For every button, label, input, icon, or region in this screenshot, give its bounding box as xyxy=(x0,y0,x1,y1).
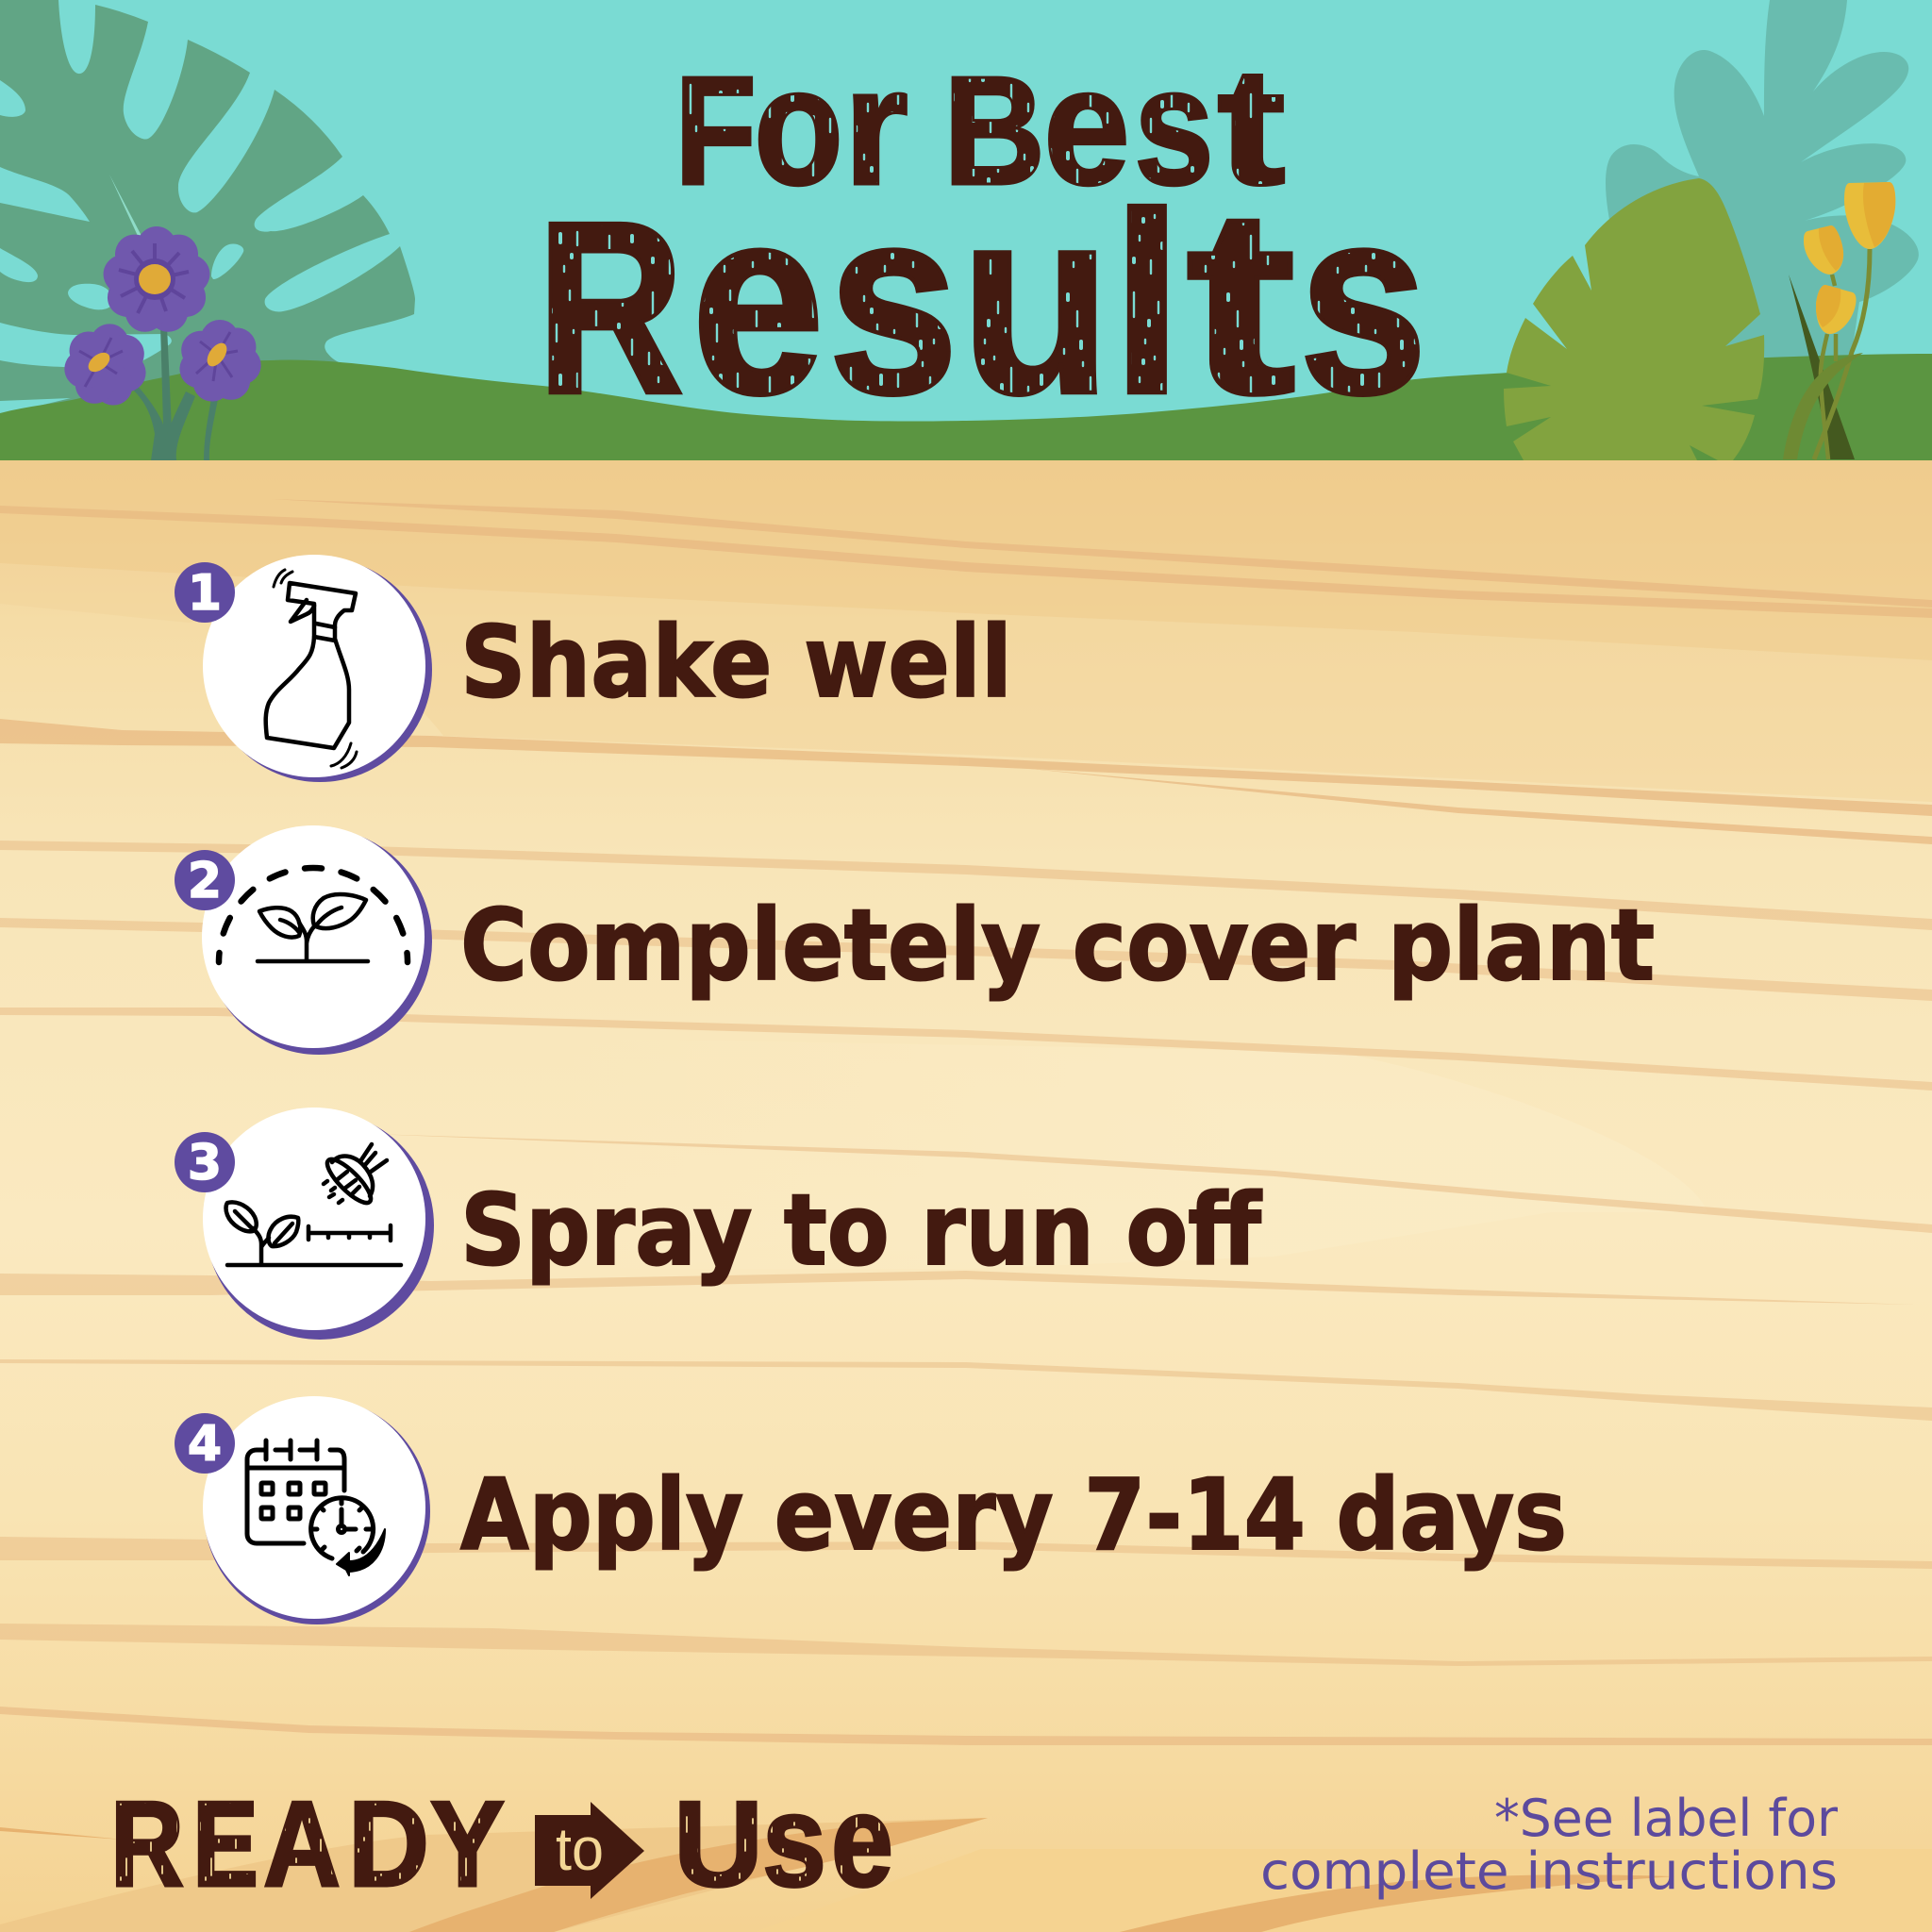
monstera leaf, left xyxy=(0,0,415,443)
word: Use: e xyxy=(831,1768,893,1914)
word: Use: s xyxy=(762,1768,826,1914)
wood panel background xyxy=(0,460,1932,1932)
tulips, right xyxy=(1783,182,1895,459)
background leaf, right xyxy=(1606,0,1919,373)
step 4 number badge: 4 xyxy=(188,1416,222,1473)
step 4 number badge xyxy=(175,1413,235,1474)
title line: Results: l xyxy=(1111,159,1183,447)
arrow with to: to xyxy=(556,1815,604,1883)
step 1 label: Shake well xyxy=(460,605,1012,720)
step 1 xyxy=(175,555,1012,782)
flower: lower right xyxy=(174,320,264,408)
word: READY: R xyxy=(110,1776,184,1912)
title line: For Best: B xyxy=(943,44,1045,217)
flower: lower left xyxy=(61,321,152,411)
step 3 number badge: 3 xyxy=(188,1135,222,1191)
title line: For Best: o xyxy=(754,32,843,220)
word: Use: U xyxy=(674,1776,763,1912)
step 3 number badge xyxy=(175,1132,235,1192)
icon: plant, ruler and sprayer xyxy=(226,1144,401,1265)
step 2 circle xyxy=(202,825,432,1055)
word: READY: A xyxy=(263,1776,341,1912)
title line: Results: s xyxy=(828,153,958,449)
step 4 label: Apply every 7-14 days xyxy=(460,1457,1567,1573)
step 4 circle xyxy=(203,1396,430,1624)
step 2 label: Completely cover plant xyxy=(460,888,1655,1003)
tulip: lower xyxy=(1816,285,1857,334)
flowers, left xyxy=(61,225,264,460)
step 4 xyxy=(175,1396,1567,1624)
title line: For Best: e xyxy=(1043,32,1130,220)
icon: spray bottle xyxy=(266,570,357,768)
footnote line 2: complete instructions xyxy=(1260,1841,1838,1901)
green hill xyxy=(0,354,1932,460)
step 1 circle xyxy=(203,555,432,782)
title line: Results: s xyxy=(1299,153,1427,449)
banana leaf, right xyxy=(1504,178,1764,460)
title line: Results: u xyxy=(960,153,1111,449)
step 2 number badge xyxy=(175,850,235,910)
title line: For Best: F xyxy=(675,44,757,217)
tulip: middle xyxy=(1804,225,1843,275)
logo: Ready to Use xyxy=(110,1768,893,1914)
flower stems xyxy=(127,325,218,460)
step 1 number badge xyxy=(175,562,235,623)
step 3 xyxy=(175,1108,1263,1340)
title line: Results: R xyxy=(537,172,684,445)
flower: top xyxy=(99,225,214,338)
arrow with to xyxy=(535,1802,644,1899)
title line: For Best: s xyxy=(1134,32,1214,220)
title line: For Best: r xyxy=(843,32,908,220)
title line: For Best: t xyxy=(1217,33,1286,220)
footnote xyxy=(1260,1789,1839,1901)
tulip: large xyxy=(1844,182,1895,249)
footnote line 1: *See label for xyxy=(1494,1789,1839,1848)
title xyxy=(537,32,1427,449)
word: READY: D xyxy=(348,1776,429,1912)
word: READY: Y xyxy=(430,1776,505,1912)
title line: Results: t xyxy=(1186,155,1296,449)
step 3 label: Spray to run off xyxy=(460,1173,1263,1288)
title line: Results: e xyxy=(691,153,824,449)
sky background xyxy=(0,0,1932,460)
step 2 xyxy=(175,825,1655,1055)
word: READY: E xyxy=(192,1776,258,1912)
icon: plant under dashed dome xyxy=(219,868,408,962)
step 3 circle xyxy=(203,1108,434,1340)
step 2 number badge: 2 xyxy=(188,853,222,909)
icon: calendar with clock xyxy=(247,1441,385,1575)
step 1 number badge: 1 xyxy=(188,565,222,622)
